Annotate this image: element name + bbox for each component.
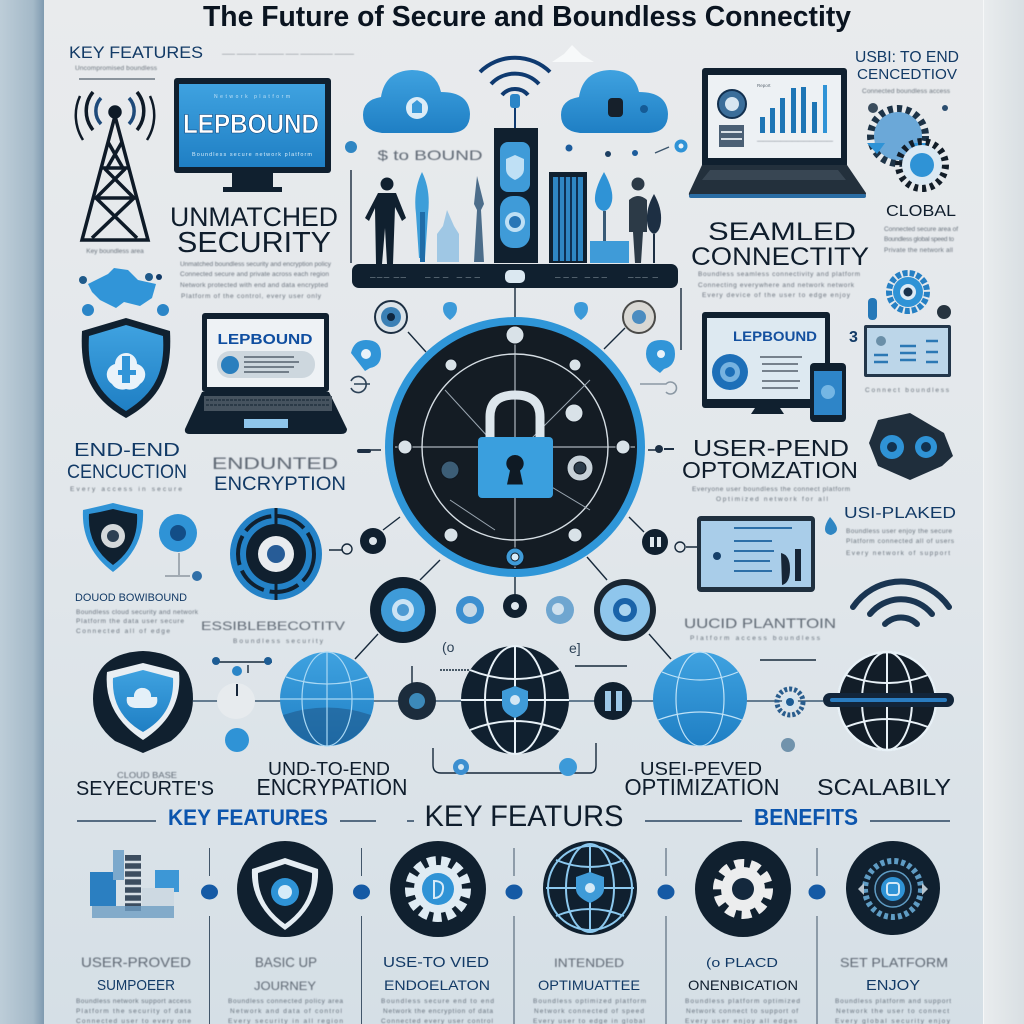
label: unod platform [684,615,836,642]
label: unod platform: Platform access boundless [690,635,821,642]
icon: white peak [552,45,594,62]
label: end-to-end encryption: UND-TO-END [268,759,390,779]
icon: monitor with brand [174,78,331,192]
icon: blue shield [82,318,170,418]
label row headings [76,759,951,800]
heading: user to end connectivity: CENCEDTIOV [857,66,957,83]
icon: blue rocket pin [415,172,429,262]
copy [533,998,646,1024]
icon: shield [237,841,333,937]
heading: global: Boundless global speed to [884,236,954,243]
icon: cog [695,841,791,937]
brand name: LEPBOUND [218,331,313,348]
rule [79,78,155,80]
small right-side mark: 3 [849,329,858,346]
icon: small node [503,594,527,618]
panel: tablet [697,516,815,592]
title: The Future of Secure and Boundless Connectity [203,1,851,33]
copy [685,998,800,1024]
heading: JOURNEY [254,979,316,993]
heading: global: CLOBAL [886,203,956,220]
shelf: ——— ——— [425,275,480,281]
heading: user-planned: Platform connected all of users [846,538,955,545]
copy: Network connect to support of [686,1008,798,1015]
heading: SET PLATFORM [840,955,948,970]
icon: person [365,178,406,264]
heading: key features left: KEY FEATURES [168,805,328,830]
heading: ENDOELATON [384,977,490,993]
icon: connector node [360,528,386,554]
icon: blue blobs and node left [212,657,272,752]
heading: INTENDED [554,956,624,970]
icon: shield on dark disc [93,651,193,753]
heading: ONENBICATION [688,977,798,993]
central lock dial [385,317,645,577]
icon: dark drop [647,194,661,234]
icon: small pins [443,302,457,320]
label: user-proved optimization: OPTIMIZATION [624,774,780,800]
icon: laptop with brand [185,313,347,434]
shelf: ——— —— [370,275,406,281]
copy: Network connected of speed [534,1008,644,1015]
icon: blue network cluster [79,268,169,316]
connector lines to lock [329,170,697,595]
icon: ring node [594,579,656,641]
heading: BASIC UP [255,954,317,970]
icon: small dark shield [83,503,143,572]
icon: second figure [629,178,647,263]
icon: gear [390,841,486,937]
heading: key features: KEY FEATURES [69,43,203,62]
icon: gear eye [868,273,951,320]
icon: dark twin-eye hexagon [869,413,953,480]
column 6: ornate icon and text [835,841,951,1024]
connector stubs [217,634,816,773]
label: user-proved optimization: USEI-PEVED [640,759,762,779]
heading: undaunted encryption [212,454,346,495]
connector nodes row [370,577,656,643]
icon: monitor with brand: Boundless secure network platform [192,152,312,158]
icon: pin [574,302,588,320]
icon: blue disc [159,514,202,581]
brand name: LEPBOUND [183,109,319,139]
icon: twin gears [867,103,948,188]
dial nodes [398,326,630,566]
heading: benefits: BENEFITS [754,804,858,830]
heading: unmatched security: SECURITY [177,227,331,259]
heading: ENJOY [866,977,920,994]
heading: user-pend optimization: Optimized network for all [716,496,829,503]
shelf: ——— ——— [555,275,608,281]
label: securities: SEYECURTE'S [76,778,214,800]
text block: connectivity copy: Every device of the user to edge enjoy [702,292,851,299]
icon: monitor with brand: Network platform [214,94,290,100]
icon: blue eye node [370,577,436,643]
shelf: ——— — [628,275,658,281]
heading: undaunted encryption: ENDUNTED [212,454,338,473]
icon: left cloud [363,70,470,133]
heading: global: Private the network all [884,247,954,254]
heading: global [884,203,958,254]
label: ensure security: ESSIBLEBECOTITV [201,619,345,633]
heading: user-pend optimization [682,435,858,503]
heading: user-pend optimization: OPTOMZATION [682,457,858,483]
label: end-to-end encryption: ENCRYPATION [256,774,408,800]
copy [835,998,951,1024]
column 5: cog icon and text [685,841,800,1024]
brand name: LEPBOUND [733,328,817,344]
copy [228,998,343,1024]
icon: small node [594,682,632,720]
copy: Network the encryption of data [383,1008,493,1015]
icon: blue globe right [653,652,747,746]
glyph: stray letters: (o [442,639,455,655]
text block: security copy: Connected secure and private across each region [180,271,329,278]
icon: signal tower: Key boundless area [86,248,144,255]
satellite icons around dial [351,301,676,453]
icon: small gear [777,689,803,752]
label: cloud bound: Connected all of edge [76,628,170,635]
heading: USE-TO VIED [383,954,489,971]
panel: top-left key features [69,43,354,80]
heading: user-pend optimization: Everyone user boundless the connect platform [692,486,850,493]
icon: wifi [480,58,550,128]
text block: connectivity copy: Connecting everywhere and network network [698,282,855,289]
heading: end-end cencuction: Every access in secure [70,486,182,493]
heading: unmatched security [170,202,338,259]
heading: user to end connectivity [855,49,959,95]
icon: blue teardrop [595,172,612,211]
icon: small blue box [590,241,629,263]
heading: end-end cencuction: END-END [74,440,180,460]
icon: ornate seal [846,841,940,935]
heading: seamless connectivity: CONNECTITY [691,243,869,271]
main row connector line [193,700,823,702]
padlock [478,395,553,498]
icon: bottle [437,210,459,262]
heading: user to end connectivity: USBI: TO END [855,49,959,66]
heading: OPTIMUATTEE [538,977,640,993]
heading: user-planned: Every network of support [846,550,950,557]
copy [381,998,494,1024]
icon: link left [351,376,370,392]
icon: dark globe with band [823,651,954,751]
icon: grey spike [474,176,484,262]
icon: globe [543,841,637,935]
copy: Boundless platform and support [835,998,951,1005]
column 4: globe icon and text [533,841,646,1024]
copy: Boundless secure end to end [381,998,494,1005]
chart caption: ————————————— [757,138,834,145]
panel: small dashboard monitor: Connect boundless [865,387,950,394]
label: bound: $ to BOUND [378,147,482,163]
bar chart [760,85,827,133]
icon: large blue gear eye [230,508,322,600]
icon: wifi arcs [853,582,949,624]
dark dial [393,325,637,569]
chart gauge icon [718,90,746,147]
column 2: shield icon and text [228,841,343,1024]
top centre: cloud and infrastructure [345,45,688,288]
label: cloud bound: Boundless cloud security and network [76,609,199,616]
copy: Boundless network support access [76,998,192,1005]
text block: connectivity copy [698,271,860,299]
header stubs: —— ——— ———— —— ————— ——— [222,51,354,58]
icon: small pin pair [453,758,577,776]
panel: right laptop chart: Report [757,83,771,88]
column 1: city icon and text [76,850,192,1024]
text block: connectivity copy: Boundless seamless connectivity and platform [698,271,860,278]
bottom column dividers [201,848,826,1024]
outer ring [385,317,645,577]
copy [76,998,192,1024]
label: unod platform: UUCID PLANTTOIN [684,615,836,631]
text block: security copy: Platform of the control, every user only [181,293,322,300]
icon: right cloud [561,70,668,133]
icon: chat left [351,340,381,371]
copy: Boundless connected policy area [228,998,343,1005]
glyph: stray letters: e] [569,640,581,656]
icon: node top-right [623,301,655,333]
copy lines [760,357,802,388]
icon: signal tower [76,92,154,255]
label: ensure security: Boundless security [233,638,324,645]
icon: link right [640,382,676,394]
heading: user-pend optimization: USER-PEND [693,435,849,461]
icon: dash marks [357,445,674,453]
text block: security copy: Network protected with end and data encrypted [180,282,328,289]
panel: right laptop chart [689,68,866,198]
heading: undaunted encryption: ENCRYPTION [214,474,346,495]
heading: user-planned: USI-PLAKED [844,505,956,522]
heading: end-end cencuction [67,440,187,493]
copy: Network and data of control [230,1008,343,1015]
icon: teardrop node [825,517,837,535]
panel: small dashboard monitor [864,325,951,394]
heading: (o PLACD [706,955,778,970]
icon: data rack [549,172,587,263]
label: cloud bound: DOUOD BOWIBOUND [75,592,187,604]
heading: key features centre: KEY FEATURS [424,800,624,833]
icon: city [90,850,179,918]
icon: small node [546,596,574,624]
text block: security copy: Unmatched boundless security and encryption policy [180,261,332,268]
label: user-proved optimization [624,759,780,800]
icon: dark globe centre [461,646,569,754]
disc icon [712,354,748,390]
heading: user to end connectivity: Connected boundless access [862,88,951,95]
rule [77,820,950,822]
heading: unmatched security: UNMATCHED [170,202,338,232]
label: cloud bound: Platform the data user secure [76,618,184,625]
label: scalability: SCALABILY [817,774,951,800]
label: ensure security [201,619,345,645]
section headings row [77,800,950,833]
caption: Uncompromised boundless [75,65,158,72]
heading: seamless connectivity: SEAMLED [708,218,856,246]
heading: user-planned [844,505,956,557]
icon: connector nodes [345,140,688,157]
icon: blue globe left [280,652,374,746]
icon: small node [456,596,484,624]
label: end-to-end encryption [256,759,408,800]
copy: Network the user to connect [836,1008,949,1015]
heading: USER-PROVED [81,954,191,970]
icon: node top-left [375,301,407,333]
heading: global: Connected secure area of [884,226,958,233]
heading: seamless connectivity [691,218,869,271]
copy: Boundless optimized platform [533,998,646,1005]
phone [810,363,846,422]
label: cloud bound [75,592,199,635]
copy: Boundless platform optimized [685,998,800,1005]
shelf [352,264,678,288]
heading: end-end cencuction: CENCUCTION [67,462,187,483]
column 3: gear icon and text [381,841,494,1024]
icon: small node [398,682,436,720]
icon: node by tablet [642,529,668,555]
copy: Platform the security of data [76,1008,191,1015]
text block: security copy [180,261,332,300]
panel: monitor and phone [702,312,846,422]
icon: server tower [494,128,538,263]
heading: user-planned: Boundless user enjoy the secure [846,528,952,535]
icon: chat right [646,340,675,373]
heading: SUMPOEER [97,977,175,994]
label: securities: CLOUD BASE [117,771,177,780]
